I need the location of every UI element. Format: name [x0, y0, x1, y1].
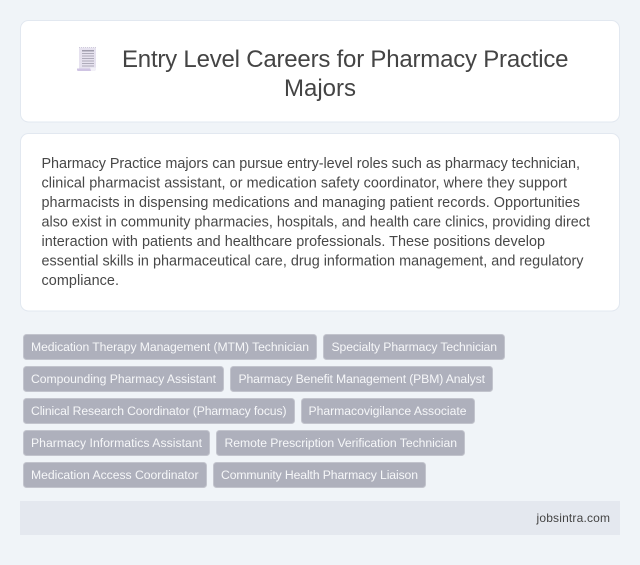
text block: description paragraph: clinical pharmacist assistant, or medication safety coordinator, where they support	[42, 176, 567, 192]
text block: description paragraph: pharmacists in dispensing medications and managing patient records. Opportunities	[42, 195, 580, 211]
tag: Medication Therapy Management (MTM) Technician	[24, 334, 316, 360]
tag: Medication Therapy Management (MTM) Technician: Medication Therapy Management (MTM) Technician	[31, 340, 309, 354]
tag: Pharmacovigilance Associate: Pharmacovigilance Associate	[308, 404, 467, 418]
tag: Pharmacy Benefit Management (PBM) Analyst: Pharmacy Benefit Management (PBM) Analyst	[238, 372, 486, 386]
text block: description paragraph: essential skills in pharmaceutical care, drug information management, and regulatory	[42, 254, 584, 270]
tag: Medication Access Coordinator: Medication Access Coordinator	[31, 468, 198, 482]
text block: description paragraph: compliance.	[42, 273, 119, 289]
tag: Community Health Pharmacy Liaison	[214, 462, 426, 488]
text block: description paragraph: Pharmacy Practice majors can pursue entry-level roles such as pharmacy technician,	[42, 156, 580, 172]
title	[122, 46, 568, 102]
tag: Pharmacy Informatics Assistant	[24, 430, 210, 456]
tag: Specialty Pharmacy Technician: Specialty Pharmacy Technician	[332, 340, 497, 354]
tag: Compounding Pharmacy Assistant: Compounding Pharmacy Assistant	[31, 372, 217, 386]
tag: Pharmacy Benefit Management (PBM) Analyst	[230, 366, 492, 392]
tag: Compounding Pharmacy Assistant	[24, 366, 224, 392]
footer: jobsintra.com	[536, 511, 610, 525]
icon: pharmacy receipt	[77, 48, 96, 71]
panel: description	[20, 134, 620, 311]
title: Majors	[284, 75, 356, 102]
tag: Remote Prescription Verification Technician	[216, 430, 464, 456]
tag: Clinical Research Coordinator (Pharmacy focus)	[24, 398, 294, 424]
tag: Community Health Pharmacy Liaison: Community Health Pharmacy Liaison	[221, 468, 418, 482]
tag: Medication Access Coordinator	[24, 462, 206, 488]
text block: description paragraph: interaction with patients and healthcare professionals. These positions develop	[42, 234, 545, 250]
tag: Pharmacy Informatics Assistant: Pharmacy Informatics Assistant	[31, 436, 203, 450]
tag: Remote Prescription Verification Technician: Remote Prescription Verification Technician	[224, 436, 457, 450]
tag list: career roles	[24, 334, 504, 488]
text block: description paragraph: also exist in community pharmacies, hospitals, and health care clinics, providing direct	[42, 214, 590, 230]
footer	[20, 501, 620, 535]
tag: Specialty Pharmacy Technician	[324, 334, 504, 360]
panel: title card	[20, 20, 620, 122]
text block: description paragraph	[42, 156, 590, 289]
title: Entry Level Careers for Pharmacy Practice	[122, 46, 568, 73]
tag: Clinical Research Coordinator (Pharmacy focus): Clinical Research Coordinator (Pharmacy focus)	[31, 404, 286, 418]
tag: Pharmacovigilance Associate	[302, 398, 474, 424]
